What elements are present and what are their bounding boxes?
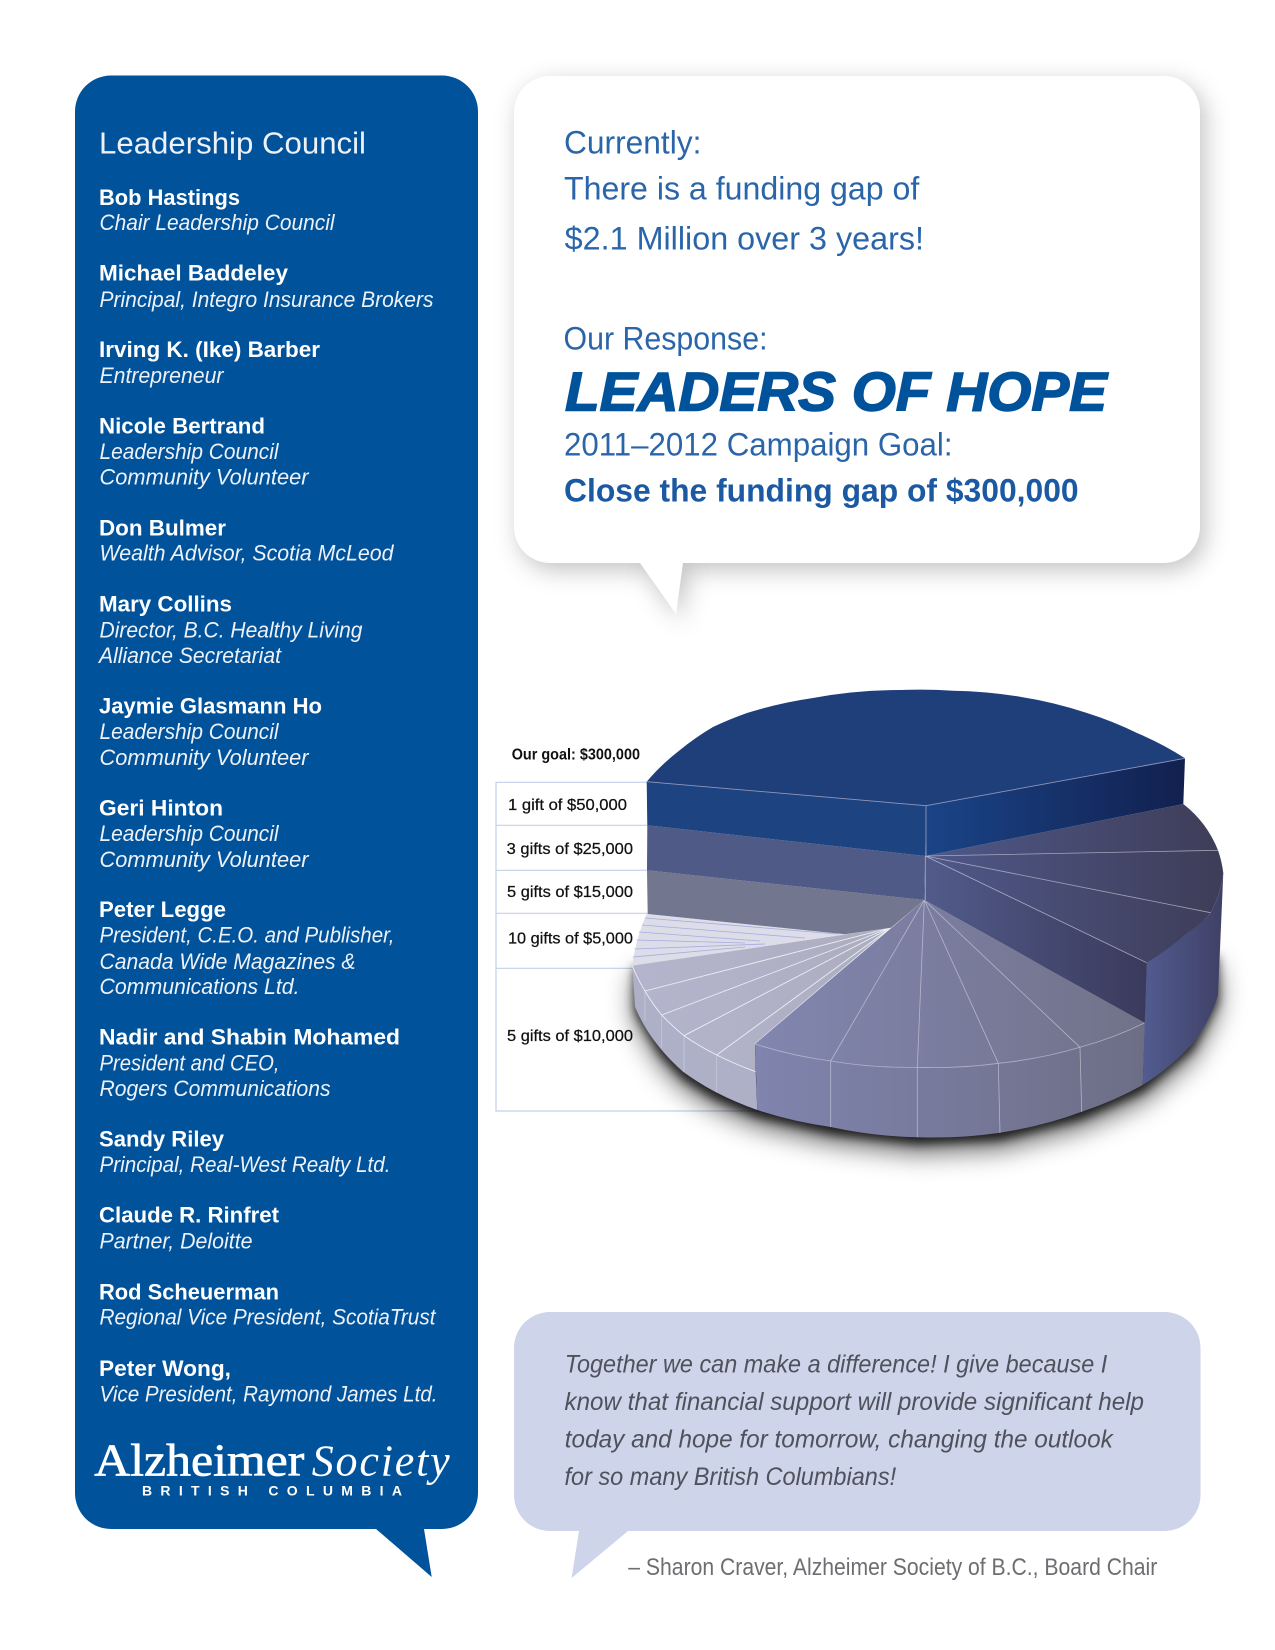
text: our response: Our Response: [564,321,768,357]
member: Nadir and Shabin Mohamed: Nadir and Shabin Mohamed [99,1025,400,1050]
member: Nicole Bertrand: Nicole Bertrand [99,414,265,438]
member: Nicole Bertrand [99,414,310,489]
label table lines [496,782,760,1111]
member: Rod Scheuerman: Regional Vice President, ScotiaTrust [100,1305,436,1330]
member: Bob Hastings [99,185,336,235]
text: current funding gap: $2.1 Million over 3 years! [565,220,924,256]
member: Don Bulmer: Don Bulmer [99,516,226,541]
member: Rod Scheuerman [99,1280,436,1330]
member: Michael Baddeley: Principal, Integro Insurance Brokers [100,287,434,312]
member: Peter Legge: Communications Ltd. [100,974,300,999]
member: Mary Collins [97,592,363,668]
member: Mary Collins: Mary Collins [99,592,232,617]
attribution: – Sharon Craver, Alzheimer Society of B.C., Board Chair [628,1554,1157,1581]
logo: Alzheimer Society British Columbia: Alzheimer [94,1434,304,1485]
member: Mary Collins: Alliance Secretariat [97,643,282,668]
label: 10 gifts of $5,000: 10 gifts of $5,000 [508,930,633,947]
member: Irving K. Barber [99,337,320,388]
label: 1 gift of $50,000: 1 gift of $50,000 [508,797,627,814]
member: Claude R. Rinfret [99,1202,280,1254]
pie contact shadow [634,957,1218,1144]
member: Nadir and Shabin Mohamed [99,1025,400,1101]
pie edge highlights [647,758,1185,856]
text: current funding gap [564,124,924,256]
panel: board chair quote [514,1312,1200,1581]
member: Peter Legge [99,897,394,999]
callout bubble [514,76,1200,614]
dark slices outer wall [1143,873,1223,1085]
logo: Alzheimer Society British Columbia [94,1434,450,1498]
member: Geri Hinton: Leadership Council [100,821,280,846]
text: campaign goal: 2011–2012 Campaign Goal: [564,426,952,462]
quote text: for so many British Columbians! [564,1463,896,1491]
member: Irving K. Barber: Irving K. (Ike) Barber [99,337,320,362]
text: close the funding gap: Close the funding gap of $300,000 [564,472,1079,508]
member: Jaymie Glasmann Ho: Leadership Council [100,719,280,744]
slice: front top of lower gifts [755,900,1145,1068]
member: Claude R. Rinfret: Claude R. Rinfret [99,1202,280,1227]
quote text [564,1351,1144,1491]
member: Nadir and Shabin Mohamed: President and CEO, [100,1051,280,1076]
member: Michael Baddeley: Michael Baddeley [99,261,289,286]
label: 5 gifts of $10,000: 5 gifts of $10,000 [507,1028,633,1045]
member: Peter Legge: Peter Legge [99,897,226,922]
member: Jaymie Glasmann Ho: Community Volunteer [100,745,310,770]
member: Nicole Bertrand: Community Volunteer [100,464,310,489]
member: Nicole Bertrand: Leadership Council [100,439,280,464]
quote text: know that financial support will provide significant help [564,1388,1144,1416]
text: current funding gap: There is a funding gap of [564,170,919,206]
member: Sandy Riley [99,1127,390,1177]
member: Geri Hinton: Geri Hinton [99,796,223,821]
slice: 1 gift of $50,000 left wall [647,782,926,856]
member: Jaymie Glasmann Ho [99,694,322,770]
member: Bob Hastings: Chair Leadership Council [100,210,336,235]
logo: Alzheimer Society British Columbia: BRITISH COLUMBIA [142,1482,402,1498]
quote text: today and hope for tomorrow, changing the outlook [565,1426,1114,1454]
logo: Alzheimer Society British Columbia: Society [312,1436,450,1485]
text: current funding gap: Currently: [564,124,701,160]
chart: 3D pie of campaign gifts [496,690,1223,1153]
member: Don Bulmer [99,516,394,566]
member: Jaymie Glasmann Ho: Jaymie Glasmann Ho [99,694,322,719]
member: Geri Hinton [99,796,310,872]
slice: 5 gifts of $10,000 side wall [632,966,757,1110]
member: Peter Legge: Canada Wide Magazines & [100,949,356,974]
quote bubble [514,1312,1200,1578]
panel: funding gap callout [514,76,1205,621]
member: Peter Wong [99,1356,438,1407]
member: Geri Hinton: Community Volunteer [100,847,310,872]
heading: Leadership Council: Leadership Council [99,125,366,160]
member: Mary Collins: Director, B.C. Healthy Living [100,618,363,643]
slice: 5 gifts of $10,000 top [632,928,891,1072]
callout shadow [519,83,1205,621]
member: Sandy Riley: Principal, Real-West Realty Ltd. [100,1152,390,1177]
member: Sandy Riley: Sandy Riley [99,1127,225,1152]
label: 5 gifts of $15,000: 5 gifts of $15,000 [507,884,633,901]
dark slices top [925,804,1223,963]
label: 3 gifts of $25,000: 3 gifts of $25,000 [507,841,633,858]
panel: leadership council [75,76,478,1577]
slice: front wall of lower gifts [755,1023,1145,1138]
member: Rod Scheuerman: Rod Scheuerman [99,1280,279,1305]
slice: 10 gifts of $5,000 hatched [632,914,891,966]
label: our goal: Our goal: $300,000 [512,746,640,763]
headline: Leaders of Hope: LEADERS OF HOPE [565,361,1109,423]
member: Peter Wong: Peter Wong, [99,1356,231,1381]
member: Don Bulmer: Wealth Advisor, Scotia McLeod [100,541,394,566]
member: Nadir and Shabin Mohamed: Rogers Communications [100,1076,330,1101]
slice: 5 gifts of $15,000 [647,870,924,934]
quote text: Together we can make a difference! I give because I [565,1351,1107,1379]
member: Bob Hastings: Bob Hastings [99,185,240,210]
pie soft shadow [634,966,1218,1153]
member: Irving K. Barber: Entrepreneur [100,363,225,388]
slice: 1 gift of $50,000 right wall [925,758,1185,856]
slice: 3 gifts of $25,000 [647,825,925,900]
member: Peter Legge: President, C.E.O. and Publisher, [100,923,394,948]
member: Claude R. Rinfret: Partner, Deloitte [100,1229,252,1254]
slice: our goal top face [647,690,1185,806]
step wall of dark slices [924,856,1147,1023]
speech bubble shape [75,76,478,1577]
member: Michael Baddeley [99,261,434,312]
member: Peter Wong: Vice President, Raymond James Ltd. [100,1382,438,1407]
